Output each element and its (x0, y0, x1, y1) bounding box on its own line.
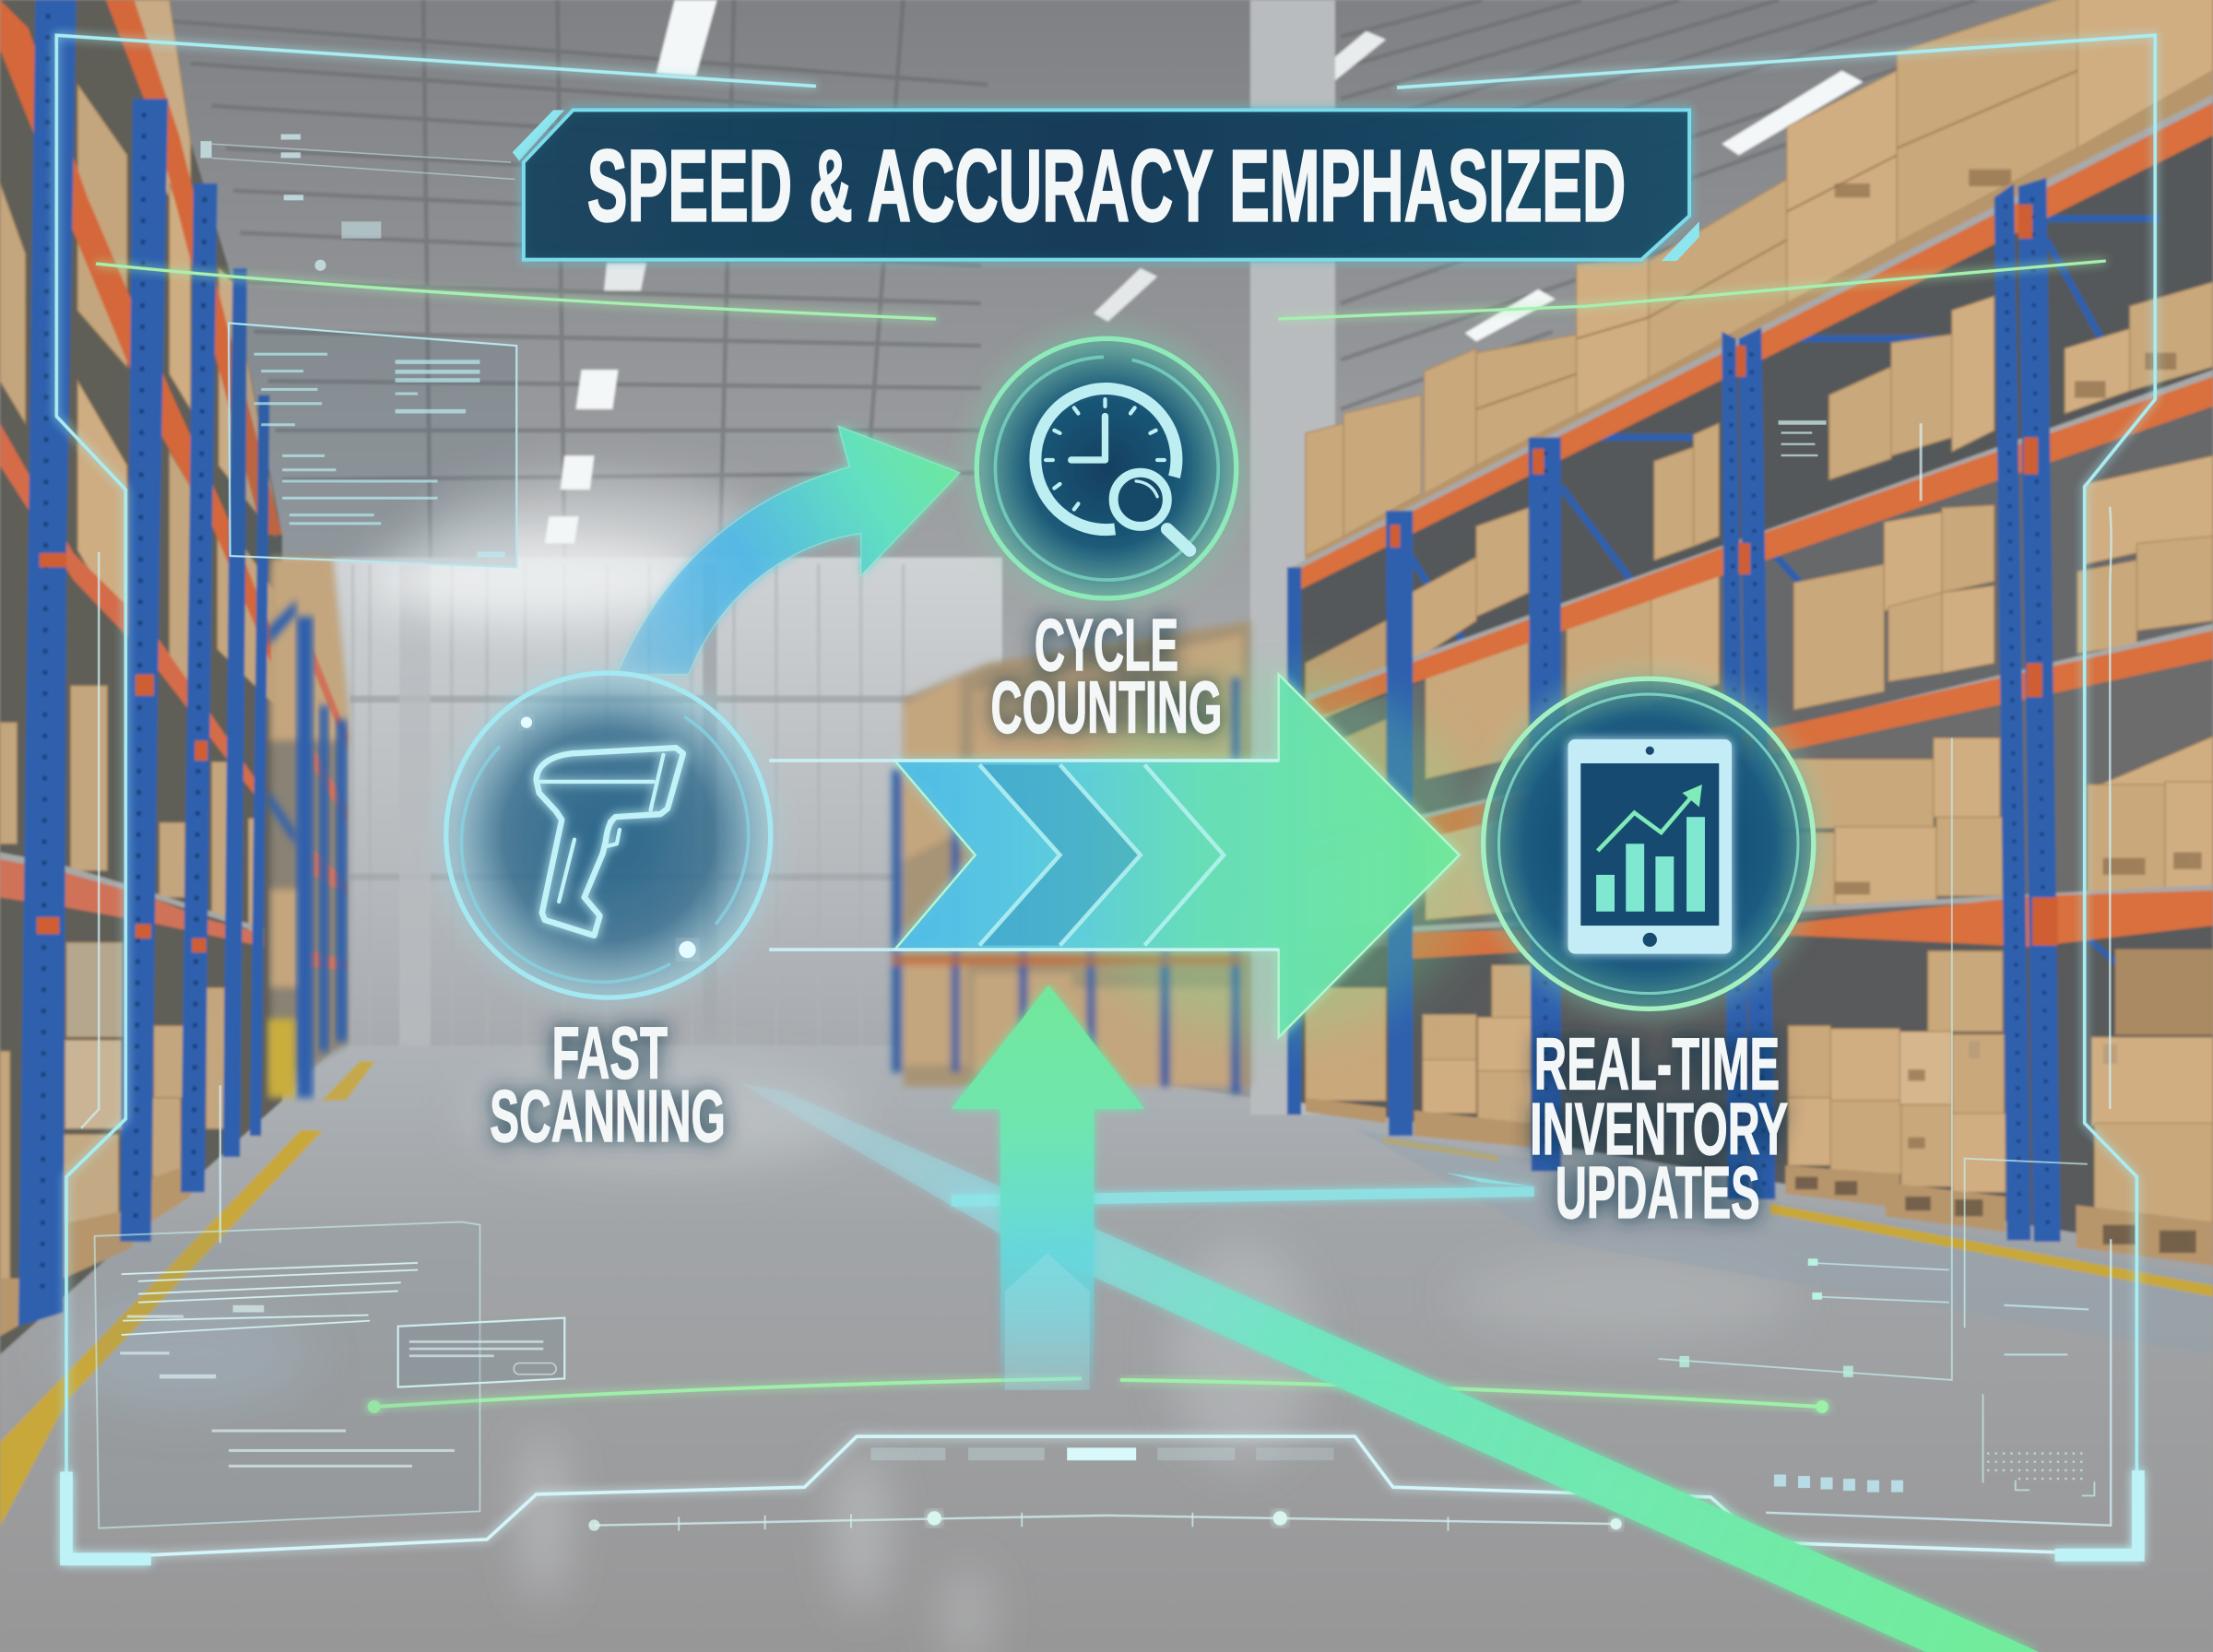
title banner (513, 110, 1699, 261)
right rack: shelf top strips (1288, 95, 2213, 933)
left rack: shelf top strips (0, 852, 264, 934)
label: fast scanning: SCANNING (490, 1075, 726, 1157)
HUD nodes bottom right (1679, 1258, 1853, 1377)
ghost panel on right shelves (1779, 420, 1923, 501)
left rack: orange brackets (37, 553, 207, 952)
label: cycle counting: CYCLE (1035, 604, 1178, 686)
scanner disc (446, 673, 771, 997)
right rack: orange brackets (1391, 205, 2058, 945)
label: cycle counting: COUNTING (990, 666, 1223, 748)
big chevron arrow: scanning to inventory (769, 672, 1482, 1039)
right rack: box labels (1835, 170, 2202, 1149)
central pillar (1250, 0, 1335, 1115)
diagonal light beam (741, 1083, 2040, 1652)
floor (0, 1045, 2213, 1652)
green scan line upper left (98, 264, 934, 319)
back wall (268, 537, 1002, 1051)
green line end dots (368, 1400, 1828, 1413)
frame: top-left bracket (56, 35, 814, 1471)
thin horizontal beam arrow (952, 1173, 1534, 1207)
right rack: orange beams (1288, 103, 2213, 960)
label: real-time inventory updates: REAL-TIME (1534, 1023, 1780, 1105)
tablet disc (1484, 678, 1814, 1009)
faded inner chevron (1005, 1253, 1090, 1390)
floor reflections (56, 1066, 1793, 1652)
green line bottom left (374, 1378, 1080, 1407)
data panel upper left (229, 324, 516, 567)
icon: barcode scanner (537, 748, 683, 936)
node: cycle counting (976, 338, 1237, 748)
right rack: upright perforations (1545, 197, 2048, 1228)
label: real-time inventory updates: INVENTORY (1530, 1088, 1788, 1170)
node: fast scanning (446, 673, 771, 1157)
frame: bottom-left thick corner (66, 1471, 151, 1559)
left rack: orange beams (0, 0, 348, 971)
small HUD readouts upper left (200, 134, 515, 271)
bottom ruler with nodes (588, 1511, 1622, 1531)
yellow floor lines (0, 1061, 2213, 1527)
up arrow: from floor to chevrons (952, 985, 1144, 1390)
popup panel bottom left (398, 1318, 564, 1387)
right rack: blue uprights (1287, 178, 2061, 1242)
banner panel (524, 110, 1689, 260)
far central racks (892, 620, 1250, 1093)
frame: top-right bracket (1399, 35, 2155, 1470)
icon: tablet with rising chart (1568, 739, 1732, 954)
label: real-time inventory updates (1530, 1023, 1788, 1233)
left rack: blue uprights (18, 0, 348, 1327)
label: fast scanning: FAST (551, 1011, 668, 1093)
left rack: upright perforations (42, 14, 205, 1305)
label: fast scanning (490, 1011, 726, 1157)
frame: bottom circuit line (151, 1436, 2055, 1555)
chevron band tint (979, 765, 1141, 945)
frame: inner vertical lines (82, 508, 2112, 1526)
ceiling (0, 0, 2213, 705)
frame: bottom-right thick corner (2055, 1470, 2138, 1555)
floor near right rack tint (1355, 1128, 2213, 1354)
arrow body (894, 675, 1460, 1037)
right rack: pallets (1306, 71, 2213, 1266)
green scan line upper right (1280, 261, 2104, 319)
right rack: boxes (1306, 0, 2213, 1221)
data panel bottom left (95, 1221, 479, 1528)
status squares bottom right (1774, 1474, 1903, 1493)
clock disc (976, 338, 1237, 598)
banner accents (513, 110, 1699, 261)
chevron bands (979, 765, 1224, 945)
label: cycle counting (990, 604, 1223, 748)
bottom status segments (870, 1447, 1333, 1460)
icon: clock with magnifier (1035, 389, 1189, 550)
left rack (0, 0, 348, 1354)
right rack: dark bay interiors (1288, 103, 2213, 1256)
label: real-time inventory updates: UPDATES (1556, 1151, 1760, 1233)
right rack: back braces (1412, 218, 2160, 1072)
node: real-time inventory updates (1484, 678, 1814, 1233)
green line bottom right (1122, 1380, 1820, 1407)
right rack: box seams and tape (1476, 71, 2077, 409)
ceiling lights (545, 0, 1863, 543)
curved arrow: scanning to cycle counting (617, 426, 960, 675)
data panel bottom right (1658, 738, 2094, 1495)
arrow shaft guide lines (769, 761, 1279, 950)
